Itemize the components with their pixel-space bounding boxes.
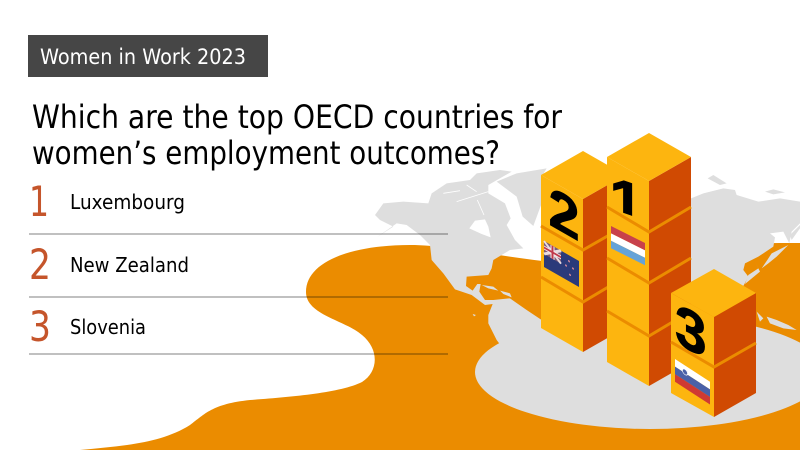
column 3 side face <box>714 293 756 417</box>
map: Hudson Bay cut-out <box>469 219 491 237</box>
flag: New Zealand <box>544 241 579 287</box>
column 2 top face <box>541 151 625 199</box>
column 2 side face <box>583 175 625 352</box>
digit 2: 2 <box>548 173 580 254</box>
column 1 block separators <box>607 207 691 336</box>
column 2 block separators <box>541 226 625 302</box>
column 1 front face <box>607 157 649 386</box>
flag: Slovenia <box>675 359 710 405</box>
rank 2: New Zealand: 2 <box>29 240 51 289</box>
rank 1: Luxembourg: Luxembourg <box>70 190 185 214</box>
column 1: Luxembourg <box>607 133 691 386</box>
map: Arctic channels <box>443 185 488 215</box>
rank 1: Luxembourg: 1 <box>29 177 49 226</box>
flag crest <box>682 368 688 376</box>
Union Jack canton <box>544 241 561 264</box>
heading line 1: Which are the top OECD countries for <box>32 98 563 136</box>
world map <box>375 168 800 357</box>
header banner <box>28 35 268 77</box>
main heading <box>32 98 563 172</box>
heading line 2: women’s employment outcomes? <box>32 134 500 172</box>
digit 3: 3 <box>675 290 707 371</box>
rank 1: Luxembourg <box>29 177 185 226</box>
column 3 top face <box>671 269 756 317</box>
column 3 block separators <box>671 342 756 367</box>
map: Eurasia, Japan and islands <box>691 175 800 293</box>
column 3: Slovenia <box>671 269 756 417</box>
digit 1: 1 <box>610 164 643 242</box>
rank 2: New Zealand <box>29 240 189 289</box>
rank 2: New Zealand: New Zealand <box>70 253 189 277</box>
column 2: New Zealand <box>541 151 625 352</box>
ranked list <box>29 177 189 351</box>
grey podium ellipse <box>475 315 800 429</box>
rank 3: Slovenia: Slovenia <box>70 315 146 339</box>
column 1 side face <box>649 157 691 386</box>
column 2 front face <box>541 175 583 352</box>
map: Pacific islands <box>757 312 797 330</box>
flag: Luxembourg <box>611 226 645 265</box>
rank 3: Slovenia <box>29 302 146 351</box>
rank 3: Slovenia: 3 <box>29 302 51 351</box>
column 3 front face <box>671 293 714 417</box>
orange wave background <box>80 243 800 450</box>
banner text: Women in Work 2023 <box>40 45 246 69</box>
map: Americas and Greenland <box>375 168 547 357</box>
Southern Cross stars <box>565 258 574 278</box>
column 1 top face <box>607 133 691 181</box>
